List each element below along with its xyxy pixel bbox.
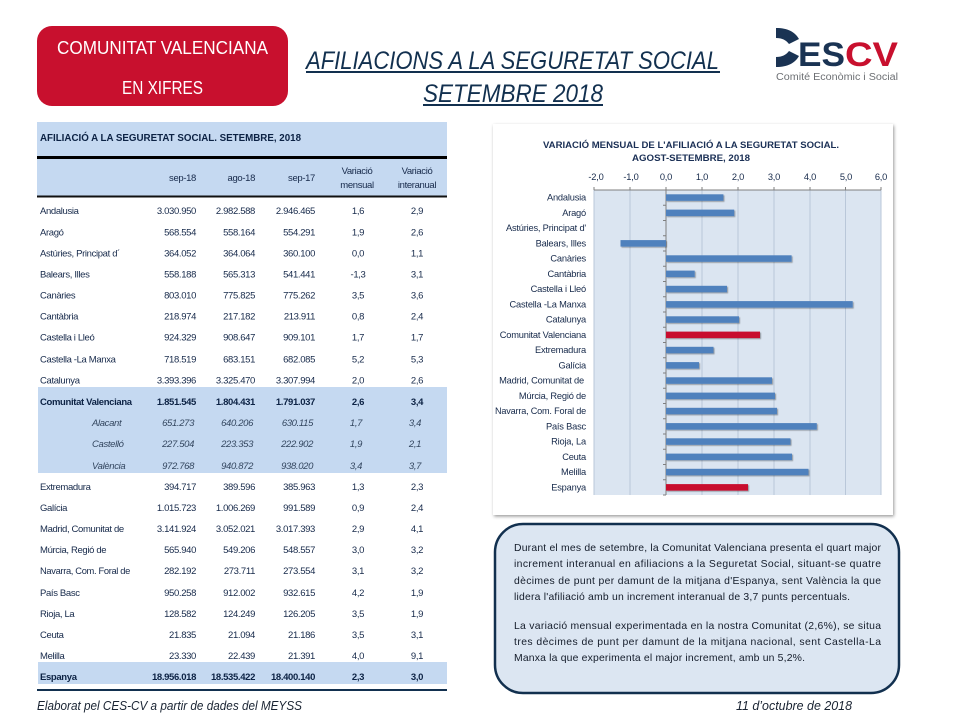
rows: remaining communities: 394.717 <box>164 482 196 493</box>
rows: provinces: 3,4 <box>350 461 362 472</box>
rows: autonomous communities: 2,9 <box>411 206 423 217</box>
rows: remaining communities: 21.094 <box>228 630 255 641</box>
rows: remaining communities: 3.141.924 <box>157 524 196 535</box>
rows: remaining communities: 3,1 <box>411 630 423 641</box>
rows: remaining communities: 4,1 <box>411 524 423 535</box>
logo: CES-CV: ES <box>798 36 845 74</box>
row: Comunitat Valenciana: 2,6 <box>352 397 364 408</box>
row: Comunitat Valenciana: 3,4 <box>411 397 424 408</box>
category labels: Navarra, Com. Foral de <box>495 406 586 416</box>
rows: autonomous communities: 2.946.465 <box>276 206 315 217</box>
red badge: Comunitat Valenciana en xifres: COMUNITAT VALENCIANA <box>57 38 268 58</box>
row: Espanya total: 3,0 <box>411 672 423 683</box>
rows: autonomous communities: 360.100 <box>283 248 315 260</box>
rows: remaining communities: 565.940 <box>164 545 196 556</box>
category labels: Extremadura <box>535 345 587 355</box>
rows: remaining communities: 1,9 <box>411 609 423 620</box>
rows: autonomous communities: 218.974 <box>164 312 196 322</box>
rows: autonomous communities: 3.393.396 <box>157 376 196 386</box>
rows: remaining communities: Múrcia, Regió de <box>40 545 106 556</box>
rows: remaining communities: 273.554 <box>283 566 315 577</box>
rows: provinces: València <box>92 461 125 472</box>
rows: autonomous communities: 217.182 <box>223 312 255 322</box>
row: Comunitat Valenciana <box>40 397 424 408</box>
rows: provinces: 2,1 <box>408 439 421 450</box>
rows: provinces: Alacant <box>91 418 122 429</box>
rows: provinces: 630.115 <box>282 418 314 429</box>
rows: remaining communities: 991.589 <box>283 503 315 514</box>
rows: autonomous communities: 3,6 <box>411 290 423 302</box>
category labels: Aragó <box>562 208 586 218</box>
rows: remaining communities: 0,9 <box>352 503 364 514</box>
rows: remaining communities: País Basc <box>40 588 80 599</box>
row: Comunitat Valenciana: Comunitat Valenciana <box>40 397 133 408</box>
category labels: Melilla <box>561 467 587 477</box>
rows: provinces <box>91 418 422 472</box>
rows: autonomous communities: Astúries, Principat d´ <box>40 248 120 260</box>
rows: autonomous communities: 3.307.994 <box>276 376 315 386</box>
rows: autonomous communities: -1,3 <box>351 270 366 280</box>
category labels: Galícia <box>558 360 587 370</box>
rows: autonomous communities: 568.554 <box>164 228 196 238</box>
rows: remaining communities: 4,0 <box>352 651 364 662</box>
rows: provinces: 3,7 <box>409 461 422 472</box>
rows: autonomous communities: Catalunya <box>40 376 81 386</box>
rows: autonomous communities: 558.164 <box>223 228 255 238</box>
rows: autonomous communities: 2,6 <box>411 228 423 238</box>
rows: remaining communities: Melilla <box>40 651 66 662</box>
rows: remaining communities: 23.330 <box>169 651 196 662</box>
category labels: Balears, Illes <box>536 238 587 248</box>
category labels: País Basc <box>546 421 587 431</box>
rows: remaining communities: Galícia <box>40 503 68 514</box>
commentary box: dècimes de punt per damunt de la mitjana d'Espanya, sent València la que <box>514 576 881 587</box>
rows: autonomous communities: 2,6 <box>411 376 423 386</box>
rows: provinces: 972.768 <box>162 461 195 472</box>
rows: provinces: 940.872 <box>221 461 254 472</box>
bars: Comunitat Valenciana and Espanya highlighted <box>666 332 760 491</box>
table title band: AFILIACIÓ A LA SEGURETAT SOCIAL. SETEMBRE, 2018 <box>40 131 301 144</box>
rows: autonomous communities: 3,5 <box>352 290 364 302</box>
rows: provinces: 938.020 <box>281 461 314 472</box>
rows: provinces: 1,9 <box>350 439 363 450</box>
rows: autonomous communities: 803.010 <box>164 290 196 302</box>
x axis labels: 6,0 <box>875 172 887 182</box>
rows: remaining communities: 1,3 <box>352 482 364 493</box>
row: Comunitat Valenciana: 1.851.545 <box>157 397 197 408</box>
x axis labels: 4,0 <box>804 172 816 182</box>
category labels: Madrid, Comunitat de <box>499 376 584 386</box>
rows: autonomous communities: 3,1 <box>411 270 423 280</box>
table column headers: Variació <box>402 166 432 177</box>
rows: autonomous communities <box>40 206 423 386</box>
rows: autonomous communities: 924.329 <box>164 332 196 344</box>
x axis labels: 0,0 <box>660 172 672 182</box>
rows: autonomous communities: 1,7 <box>352 332 364 344</box>
rows: autonomous communities: 2,0 <box>352 376 364 386</box>
rows: autonomous communities: 775.262 <box>283 290 315 302</box>
rows: autonomous communities: 554.291 <box>283 228 315 238</box>
rows: autonomous communities: 1,1 <box>411 248 423 260</box>
category labels: Andalusia <box>547 192 587 202</box>
logo: CES-CV: CV <box>845 36 898 74</box>
row: Espanya total: Espanya <box>40 672 78 683</box>
rows: remaining communities: 3,5 <box>352 630 364 641</box>
rows: autonomous communities: Canàries <box>40 290 76 302</box>
rows: autonomous communities: 565.313 <box>223 270 255 280</box>
panel: monthly variation bar chart <box>493 124 893 515</box>
rows: remaining communities: 3,0 <box>352 545 364 556</box>
rows: remaining communities: 21.835 <box>169 630 196 641</box>
category labels: Catalunya <box>546 314 587 324</box>
red badge: Comunitat Valenciana en xifres: EN XIFRES <box>122 78 203 98</box>
x axis labels: 2,0 <box>732 172 744 182</box>
rows: remaining communities <box>40 482 423 662</box>
rows: provinces: Castelló <box>92 439 125 450</box>
rows: remaining communities: 3,2 <box>411 566 423 577</box>
title: SETEMBRE 2018 <box>423 80 603 108</box>
rows: remaining communities: Extremadura <box>40 482 92 493</box>
table column headers: mensual <box>340 180 374 191</box>
x axis labels: 1,0 <box>696 172 708 182</box>
rows: remaining communities: 2,9 <box>352 524 364 535</box>
highlighted band: Comunitat Valenciana and provinces <box>38 387 447 473</box>
rows: autonomous communities: Aragó <box>40 228 64 238</box>
commentary box <box>495 524 899 693</box>
rows: remaining communities: 1.006.269 <box>216 503 255 514</box>
commentary box: increment interanual en afiliacions a la Seguretat Social, situant-se quatre <box>514 559 881 570</box>
logo: CES-CV: Comité Econòmic i Social <box>776 72 898 83</box>
rows: autonomous communities: 3.030.950 <box>157 206 196 217</box>
rows: remaining communities: 124.249 <box>223 609 255 620</box>
rows: remaining communities: 950.258 <box>164 588 196 599</box>
vertical axis <box>663 190 666 495</box>
category labels <box>495 192 587 492</box>
table title band <box>37 122 447 159</box>
table column headers <box>37 159 447 198</box>
bars: regions <box>620 194 853 475</box>
table column headers: Variació <box>342 166 372 177</box>
panel: data table <box>37 122 447 691</box>
row: Espanya total: 18.956.018 <box>152 672 196 683</box>
rows: remaining communities: 2,3 <box>411 482 423 493</box>
rows: provinces: 1,7 <box>350 418 363 429</box>
red badge: Comunitat Valenciana en xifres <box>37 26 288 106</box>
x axis labels <box>588 172 887 182</box>
row: Espanya total: 2,3 <box>352 672 364 683</box>
table column headers: ago-18 <box>228 173 255 184</box>
x axis labels: 5,0 <box>840 172 852 182</box>
logo: CES-CV <box>776 28 898 83</box>
commentary box: tres dècimes de punt per damunt de la mitjana nacional, sent Castella-La <box>514 637 881 648</box>
category labels: Astúries, Principat d' <box>506 223 586 233</box>
rows: remaining communities: 126.205 <box>283 609 315 620</box>
rows: remaining communities: Madrid, Comunitat de <box>40 524 124 535</box>
rows: autonomous communities: 718.519 <box>164 354 196 366</box>
rows: remaining communities: 273.711 <box>224 566 255 577</box>
rows: remaining communities: 1.015.723 <box>157 503 196 514</box>
rows: remaining communities: 932.615 <box>283 588 315 599</box>
x axis labels: -1,0 <box>623 172 639 182</box>
rows: remaining communities: 3.017.393 <box>276 524 315 535</box>
rows: autonomous communities: 2,4 <box>411 312 423 322</box>
rows: autonomous communities: 683.151 <box>223 354 255 366</box>
rows: autonomous communities: 1,6 <box>352 206 364 217</box>
table column headers: sep-17 <box>288 173 315 184</box>
rows: remaining communities: 21.186 <box>288 630 315 641</box>
rows: autonomous communities: Balears, Illes <box>40 270 90 280</box>
rows: remaining communities: Navarra, Com. Foral de <box>40 566 130 577</box>
rows: remaining communities: 4,2 <box>352 588 364 599</box>
rows: autonomous communities: 558.188 <box>164 270 196 280</box>
category labels: Múrcia, Regió de <box>519 391 586 401</box>
category labels: Rioja, La <box>551 436 587 446</box>
rows: autonomous communities: Cantàbria <box>40 312 79 322</box>
source note: Elaborat pel CES-CV a partir de dades del MEYSS <box>37 699 303 713</box>
rows: provinces: 223.353 <box>220 439 254 450</box>
rows: remaining communities: 389.596 <box>223 482 255 493</box>
rows: remaining communities: 548.557 <box>283 545 315 556</box>
rows: provinces: 227.504 <box>161 439 194 450</box>
category labels: Espanya <box>551 482 587 492</box>
rows: remaining communities: 22.439 <box>228 651 255 662</box>
category labels: Castella i Lleó <box>531 284 586 294</box>
rows: autonomous communities: 5,3 <box>411 354 423 366</box>
rows: autonomous communities: Castella i Lleó <box>40 332 94 344</box>
commentary box: Manxa la que experimenta el major increment, amb un 5,2%. <box>514 653 805 664</box>
rows: provinces: 640.206 <box>221 418 254 429</box>
category labels: Castella -La Manxa <box>510 299 587 309</box>
rows: provinces: 651.273 <box>162 418 195 429</box>
rows: remaining communities: 282.192 <box>164 566 196 577</box>
rows: remaining communities: 3,5 <box>352 609 364 620</box>
rows: autonomous communities: 1,9 <box>352 228 364 238</box>
title: AFILIACIONS A LA SEGURETAT SOCIAL <box>304 47 719 75</box>
date: 11 d’octubre de 2018 <box>736 699 852 713</box>
rows: remaining communities: 385.963 <box>283 482 315 493</box>
row: Espanya total <box>38 662 447 684</box>
rows: remaining communities: Rioja, La <box>40 609 75 620</box>
table column headers: sep-18 <box>169 173 196 184</box>
category labels: Cantàbria <box>547 269 587 279</box>
x axis labels: 3,0 <box>768 172 780 182</box>
rows: autonomous communities: 0,0 <box>352 248 364 260</box>
rows: autonomous communities: 2.982.588 <box>216 206 255 217</box>
rows: remaining communities: 912.002 <box>223 588 255 599</box>
rows: autonomous communities: 682.085 <box>283 354 315 366</box>
commentary box: Durant el mes de setembre, la Comunitat Valenciana presenta el quart major <box>514 543 882 554</box>
plot area <box>594 190 881 495</box>
rows: autonomous communities: 364.064 <box>223 248 255 260</box>
category labels: Canàries <box>550 254 587 264</box>
rows: autonomous communities: Andalusia <box>40 206 80 217</box>
rows: autonomous communities: 908.647 <box>223 332 255 344</box>
rows: autonomous communities: 213.911 <box>284 312 315 322</box>
chart title: VARIACIÓ MENSUAL DE L'AFILIACIÓ A LA SEGURETAT SOCIAL. <box>543 139 839 151</box>
rows: remaining communities: 128.582 <box>164 609 196 620</box>
rows: remaining communities: Ceuta <box>40 630 65 641</box>
commentary box: lidera l'afiliació amb un increment interanual de 3,7 punts percentuals. <box>514 592 850 603</box>
rows: remaining communities: 2,4 <box>411 503 423 514</box>
rows: autonomous communities: Castella -La Manxa <box>40 354 117 366</box>
row: Espanya total: 18.400.140 <box>271 672 315 683</box>
row: Comunitat Valenciana: 1.791.037 <box>276 397 315 408</box>
rows: autonomous communities: 3.325.470 <box>216 376 255 386</box>
rows: remaining communities: 1,9 <box>411 588 423 599</box>
category labels: Comunitat Valenciana <box>500 330 587 340</box>
rows: autonomous communities: 5,2 <box>352 354 364 366</box>
rows: autonomous communities: 0,8 <box>352 312 364 322</box>
rows: autonomous communities: 1,7 <box>411 332 423 344</box>
rows: provinces: 3,4 <box>409 418 421 429</box>
row: Espanya total: 18.535.422 <box>211 672 255 683</box>
rows: remaining communities: 21.391 <box>288 651 315 662</box>
chart title: AGOST-SETEMBRE, 2018 <box>632 153 750 164</box>
rows: autonomous communities: 541.441 <box>283 270 315 280</box>
rows: autonomous communities: 775.825 <box>223 290 255 302</box>
table column headers: interanual <box>398 180 436 191</box>
row: Comunitat Valenciana: 1.804.431 <box>216 397 256 408</box>
rows: remaining communities: 9,1 <box>411 651 423 662</box>
rows: provinces: 222.902 <box>280 439 314 450</box>
x axis labels: -2,0 <box>588 172 604 182</box>
rows: autonomous communities: 364.052 <box>164 248 196 260</box>
category labels: Ceuta <box>562 452 587 462</box>
rows: autonomous communities: 909.101 <box>283 332 315 344</box>
rows: remaining communities: 3,2 <box>411 545 423 556</box>
rows: remaining communities: 3.052.021 <box>216 524 255 535</box>
commentary box: La variació mensual experimentada en la nostra Comunitat (2,6%), se situa <box>514 621 881 632</box>
rows: remaining communities: 3,1 <box>352 566 364 577</box>
title <box>304 47 720 108</box>
chart title <box>543 139 839 164</box>
rows: remaining communities: 549.206 <box>223 545 255 556</box>
